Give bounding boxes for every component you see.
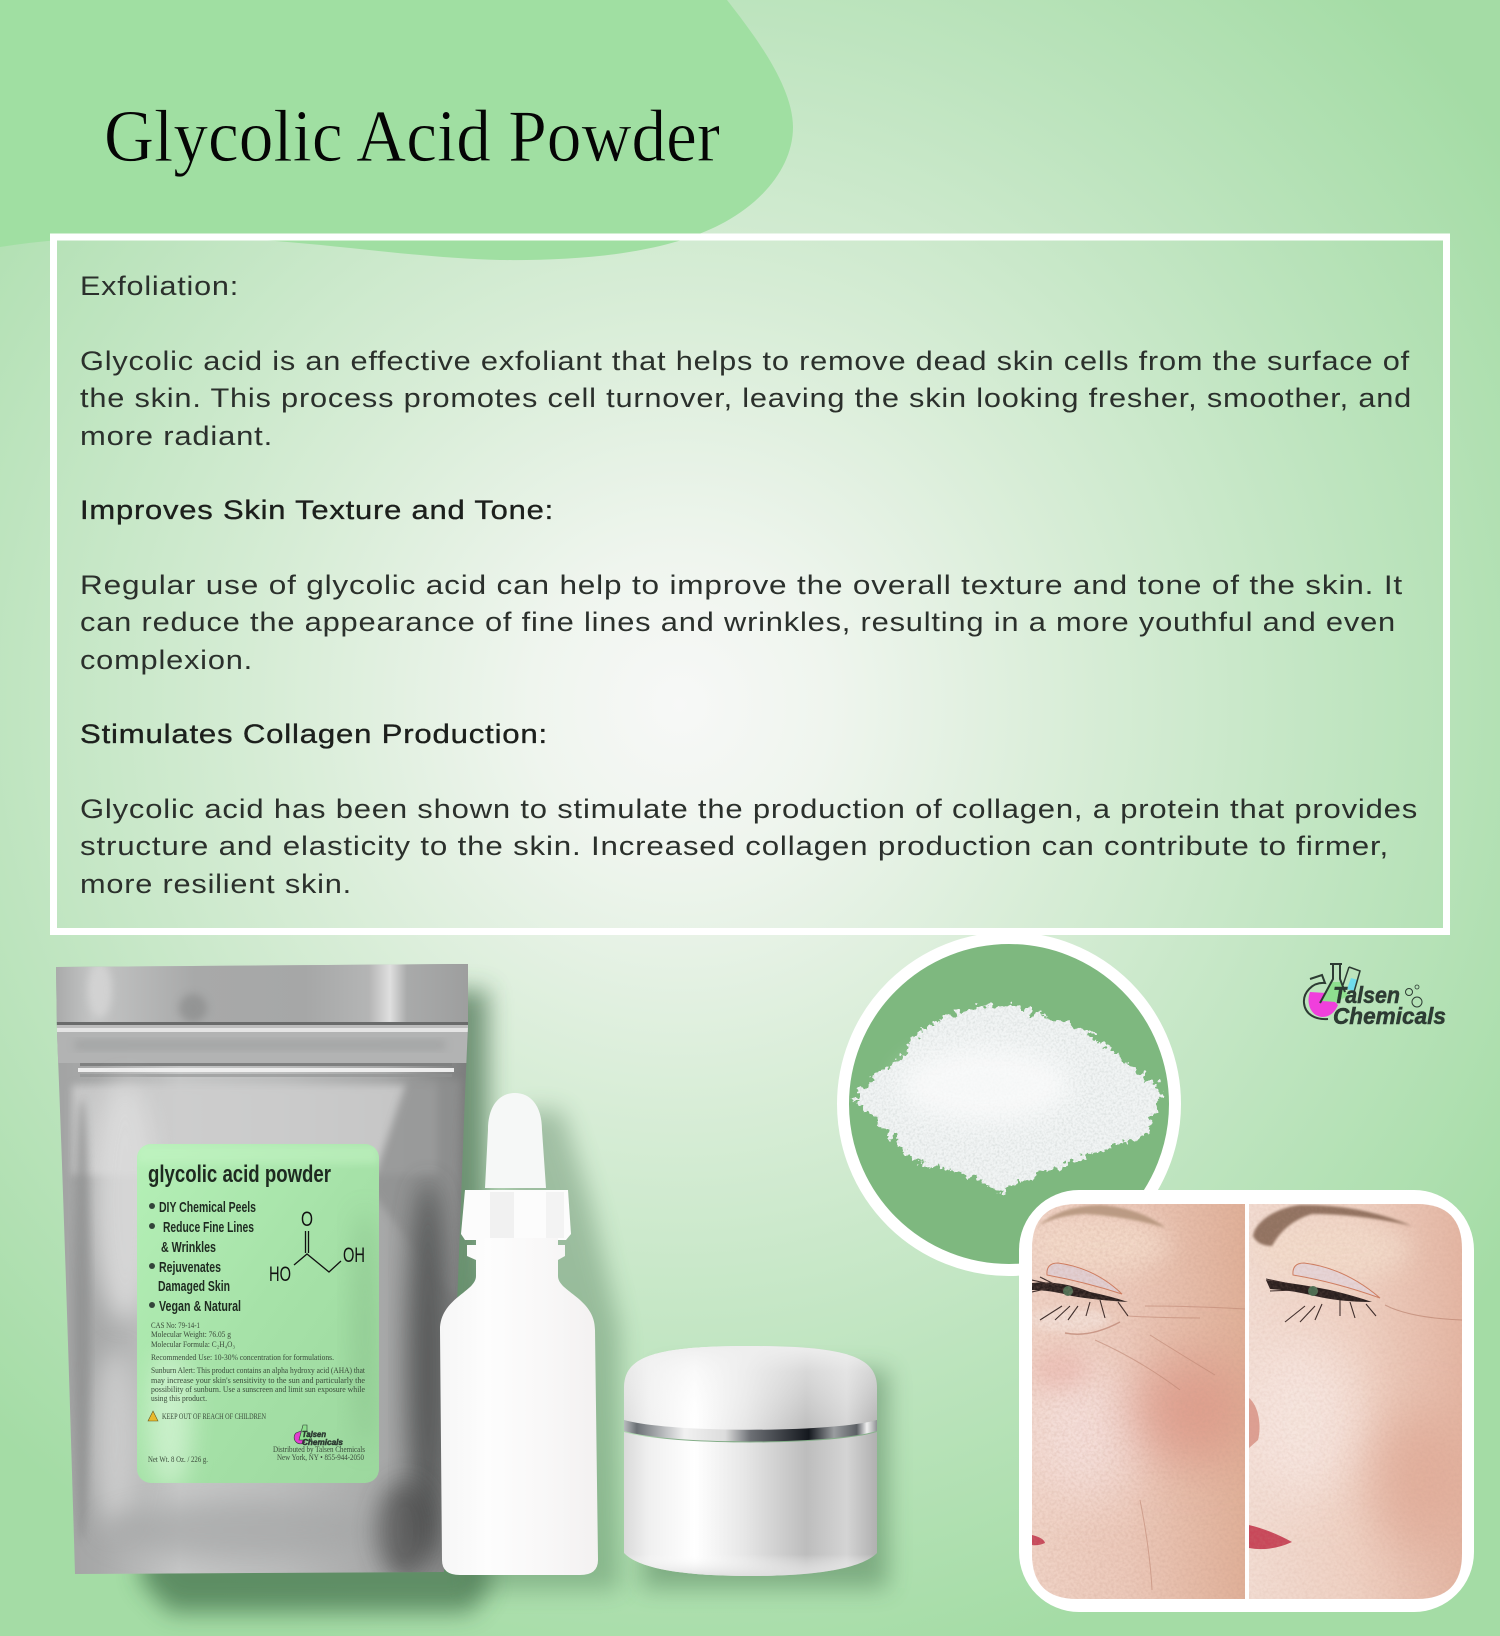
label fine print: Sunburn Alert: This product contains an alpha hydroxy acid (AHA) that: [151, 1366, 366, 1375]
label bullet list: Damaged Skin: [158, 1278, 230, 1295]
text block: collagen: more resilient skin.: [80, 869, 352, 899]
logo: Talsen Chemicals: [1304, 964, 1446, 1029]
after: smooth skin: [1240, 1204, 1470, 1599]
panel: benefits text frame: [54, 237, 1446, 932]
subheading: texture and tone: Improves Skin Texture and Tone:: [80, 495, 554, 525]
label bullet list: Rejuvenates: [159, 1259, 221, 1276]
label bullet list: [149, 1199, 256, 1315]
chemical structure: O: [301, 1208, 313, 1231]
label bullet list: Vegan & Natural: [159, 1298, 241, 1315]
distributor text: Distributed by Talsen Chemicals: [273, 1445, 365, 1454]
text block: texture and tone: Regular use of glycolic acid can help to improve the overall texture and tone of the skin. It: [80, 570, 1403, 600]
before: wrinkled skin: [1025, 1204, 1250, 1599]
text block: collagen: [80, 794, 1418, 899]
icon: warning triangle: [148, 1411, 158, 1421]
small logo on label: [294, 1425, 344, 1447]
subheading: collagen: Stimulates Collagen Production:: [80, 719, 548, 749]
dropper bottle: [440, 1093, 620, 1590]
label fine print: Molecular Weight: 76.05 g: [151, 1330, 231, 1339]
text block: exfoliation: more radiant.: [80, 421, 273, 451]
label fine print: Recommended Use: 10-30% concentration for formulations.: [151, 1353, 334, 1362]
net weight: Net Wt. 8 Oz. / 226 g.: [148, 1455, 208, 1464]
warning text: KEEP OUT OF REACH OF CHILDREN: [162, 1412, 266, 1421]
decorative header blob: [0, 0, 793, 260]
subheading: exfoliation: Exfoliation:: [80, 271, 239, 301]
text block: exfoliation: [80, 346, 1412, 451]
distributor text: New York, NY • 855-944-2050: [277, 1453, 364, 1462]
small logo on label: Chemicals: [302, 1438, 344, 1447]
text block: texture and tone: can reduce the appearance of fine lines and wrinkles, resulting in a more youthful and even: [80, 607, 1396, 637]
text block: exfoliation: Glycolic acid is an effective exfoliant that helps to remove dead skin cells from the surface of: [80, 346, 1410, 376]
powder pile: [853, 1005, 1163, 1192]
label fine print: possibility of sunburn. Use a sunscreen and limit sun exposure while: [151, 1385, 365, 1394]
label fine print: CAS No: 79-14-1: [151, 1321, 200, 1330]
label title: glycolic acid powder: [148, 1161, 331, 1188]
label fine print: Molecular Formula: C₂H₄O₃: [151, 1340, 235, 1349]
label bullet list: DIY Chemical Peels: [159, 1199, 256, 1216]
text block: collagen: Glycolic acid has been shown to stimulate the production of collagen, a protein that provides: [80, 794, 1418, 824]
text block: texture and tone: complexion.: [80, 645, 253, 675]
small logo on label: Talsen: [302, 1430, 326, 1439]
text block: texture and tone: [80, 570, 1403, 675]
text block: exfoliation: the skin. This process promotes cell turnover, leaving the skin looking fresher, smoother, and: [80, 383, 1412, 413]
product pouch: [50, 960, 488, 1612]
chemical structure: OH: [343, 1244, 365, 1267]
logo: Talsen Chemicals: Talsen: [1333, 982, 1400, 1008]
distributor text: [273, 1445, 365, 1462]
label bullet list: Reduce Fine Lines: [163, 1219, 254, 1236]
product label: [137, 1144, 379, 1490]
chemical structure: [269, 1208, 365, 1286]
cream jar: [624, 1346, 888, 1588]
title: Glycolic Acid Powder: [104, 96, 720, 178]
label bullet list: & Wrinkles: [161, 1239, 216, 1256]
label fine print: [151, 1321, 366, 1403]
powder photo circle: [843, 938, 1175, 1270]
label fine print: may increase your skin's sensitivity to the sun and particularly the: [151, 1376, 365, 1385]
chemical structure: HO: [269, 1263, 291, 1286]
before and after skin photo: [1019, 1190, 1474, 1612]
logo: Talsen Chemicals: Chemicals: [1333, 1003, 1446, 1029]
label fine print: using this product.: [151, 1394, 207, 1403]
text block: collagen: structure and elasticity to the skin. Increased collagen production can contribute to firmer,: [80, 831, 1389, 861]
